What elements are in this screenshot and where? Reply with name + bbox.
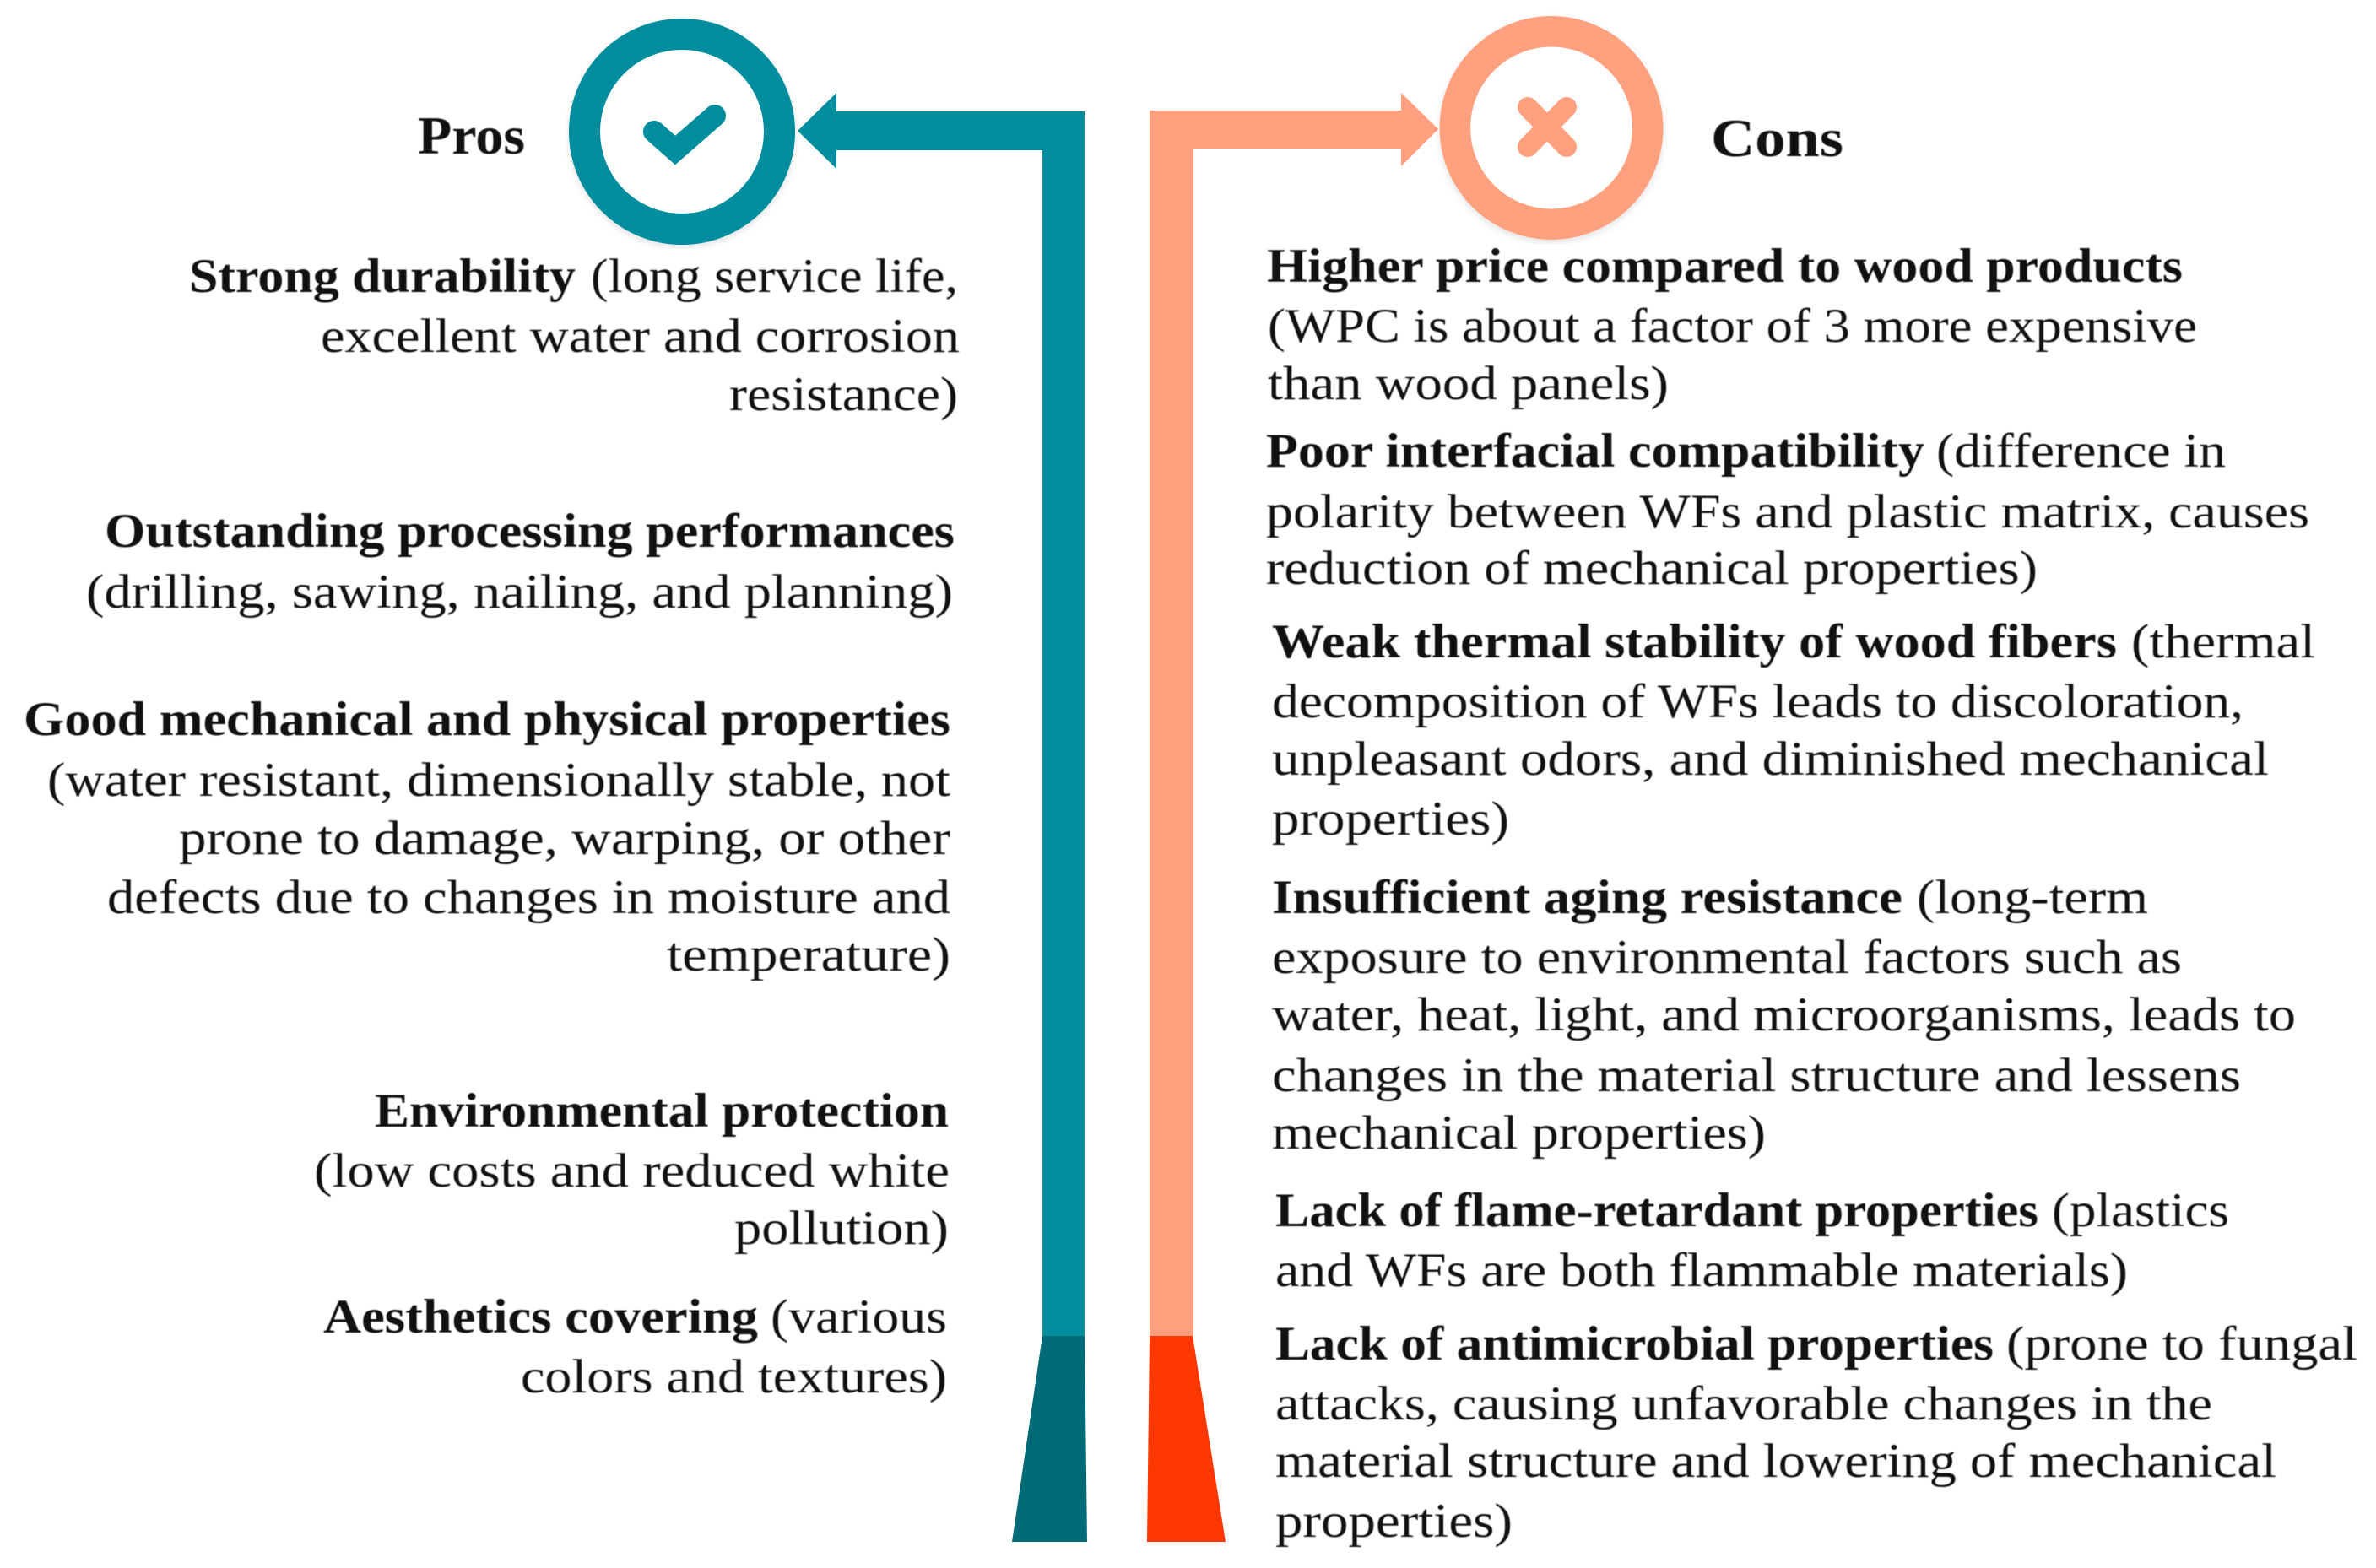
text block: poor interfacial compatibility: [1266, 424, 2309, 595]
text block: good mechanical and physical properties: defects due to changes in moisture and: [107, 871, 950, 924]
text block: lack of flame-retardant properties: and WFs are both flammable materials): [1275, 1244, 2128, 1297]
text block: lack of antimicrobial properties: properties): [1275, 1495, 1513, 1548]
text block: weak thermal stability: Weak thermal stability of wood fibers: [1272, 615, 2117, 668]
text block: environmental protection: [314, 1084, 950, 1255]
panel: cons arrow bar: [1147, 93, 1438, 1542]
text block: good mechanical and physical properties: (water resistant, dimensionally stable, not: [47, 754, 950, 807]
text block: strong durability: [189, 250, 960, 421]
text block: environmental protection: (low costs and reduced white: [314, 1144, 950, 1198]
text block: weak thermal stability: decomposition of WFs leads to discoloration,: [1272, 675, 2243, 728]
text block: strong durability: Strong durability: [189, 250, 576, 303]
text block: strong durability: excellent water and corrosion: [321, 310, 960, 363]
text block: higher price: than wood panels): [1268, 357, 1669, 410]
text block: aesthetics covering: Aesthetics covering: [323, 1290, 758, 1344]
text block: poor interfacial compatibility: reduction of mechanical properties): [1266, 542, 2038, 595]
text block: good mechanical and physical properties: prone to damage, warping, or other: [179, 812, 950, 865]
text block: aesthetics covering: (various: [771, 1290, 947, 1344]
text block: weak thermal stability: unpleasant odors, and diminished mechanical: [1272, 733, 2269, 786]
text block: lack of flame-retardant properties: Lack of flame-retardant properties: [1275, 1184, 2038, 1237]
arrow: teal bent arrow: [798, 93, 1085, 1336]
text block: insufficient aging resistance: changes in the material structure and lessens: [1272, 1049, 2241, 1102]
text block: outstanding processing performances: (drilling, sawing, nailing, and planning): [86, 565, 953, 619]
text block: good mechanical and physical properties: [24, 693, 950, 981]
text block: higher price: [1267, 240, 2197, 410]
text block: lack of antimicrobial properties: Lack of antimicrobial properties: [1275, 1317, 1994, 1371]
text block: weak thermal stability: [1272, 615, 2315, 846]
text block: higher price: (WPC is about a factor of 3 more expensive: [1268, 300, 2197, 353]
text block: environmental protection: Environmental protection: [375, 1084, 949, 1138]
text block: lack of antimicrobial properties: attacks, causing unfavorable changes in the: [1275, 1377, 2212, 1430]
text block: strong durability: (long service life,: [591, 250, 958, 303]
text block: lack of antimicrobial properties: [1275, 1317, 2357, 1548]
text block: insufficient aging resistance: (long-term: [1917, 871, 2148, 924]
text block: aesthetics covering: [323, 1290, 947, 1403]
text block: lack of flame-retardant properties: (plastics: [2052, 1184, 2229, 1237]
arrow: salmon bent arrow: [1150, 93, 1438, 1336]
text block: poor interfacial compatibility: Poor interfacial compatibility: [1266, 424, 1924, 478]
heading: Cons: Cons: [1711, 109, 1843, 168]
text block: lack of antimicrobial properties: (prone to fungal: [2006, 1317, 2357, 1371]
text block: weak thermal stability: properties): [1272, 792, 1509, 846]
text block: lack of antimicrobial properties: material structure and lowering of mechanical: [1275, 1435, 2276, 1488]
heading: Pros: Pros: [418, 106, 525, 165]
text block: insufficient aging resistance: exposure to environmental factors such as: [1272, 931, 2182, 984]
text block: insufficient aging resistance: [1272, 871, 2296, 1160]
panel: pros list: [24, 250, 960, 1403]
base: dark teal trapezoid: [1012, 1336, 1087, 1542]
text block: aesthetics covering: colors and textures): [521, 1350, 947, 1403]
panel: cons list: [1266, 240, 2357, 1548]
text block: good mechanical and physical properties: Good mechanical and physical properties: [24, 693, 950, 746]
text block: outstanding processing performances: [86, 505, 955, 619]
panel: pros arrow bar: [798, 93, 1087, 1542]
text block: environmental protection: pollution): [734, 1202, 949, 1255]
text block: higher price: Higher price compared to wood products: [1267, 240, 2183, 293]
text block: good mechanical and physical properties: temperature): [667, 928, 950, 981]
text block: insufficient aging resistance: mechanical properties): [1272, 1106, 1766, 1160]
text block: poor interfacial compatibility: (difference in: [1936, 424, 2226, 478]
text block: insufficient aging resistance: Insufficient aging resistance: [1272, 871, 1902, 924]
base: orange-red trapezoid: [1147, 1336, 1226, 1542]
text block: insufficient aging resistance: water, heat, light, and microorganisms, leads to: [1272, 988, 2296, 1041]
text block: poor interfacial compatibility: polarity between WFs and plastic matrix, causes: [1266, 485, 2309, 538]
text block: weak thermal stability: (thermal: [2131, 615, 2315, 668]
text block: lack of flame-retardant properties: [1275, 1184, 2229, 1297]
text block: strong durability: resistance): [729, 368, 958, 421]
icon: cons cross circle: [1455, 31, 1648, 224]
text block: outstanding processing performances: Outstanding processing performances: [105, 505, 955, 558]
icon: pros check circle: [584, 34, 780, 230]
